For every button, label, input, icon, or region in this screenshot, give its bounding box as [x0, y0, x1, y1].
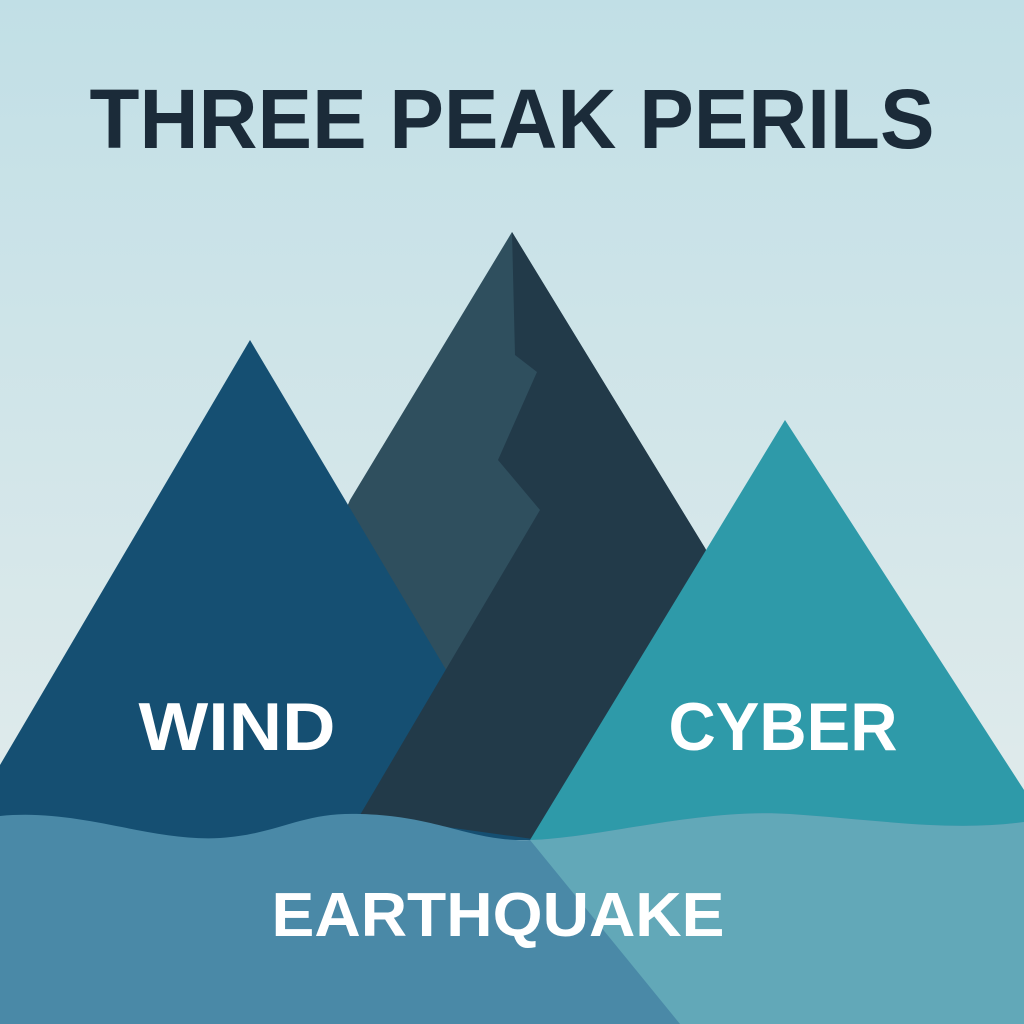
title: THREE PEAK PERILS [90, 72, 934, 166]
mountain face: dark side [360, 232, 860, 840]
mountain: cyber [530, 420, 1024, 840]
mountain: earthquake (middle) [200, 232, 860, 840]
label: wind: WIND [138, 689, 336, 765]
label: cyber: CYBER [668, 689, 898, 765]
mountain: wind [0, 340, 540, 840]
water band [0, 813, 1024, 1024]
label: earthquake: EARTHQUAKE [272, 881, 724, 950]
